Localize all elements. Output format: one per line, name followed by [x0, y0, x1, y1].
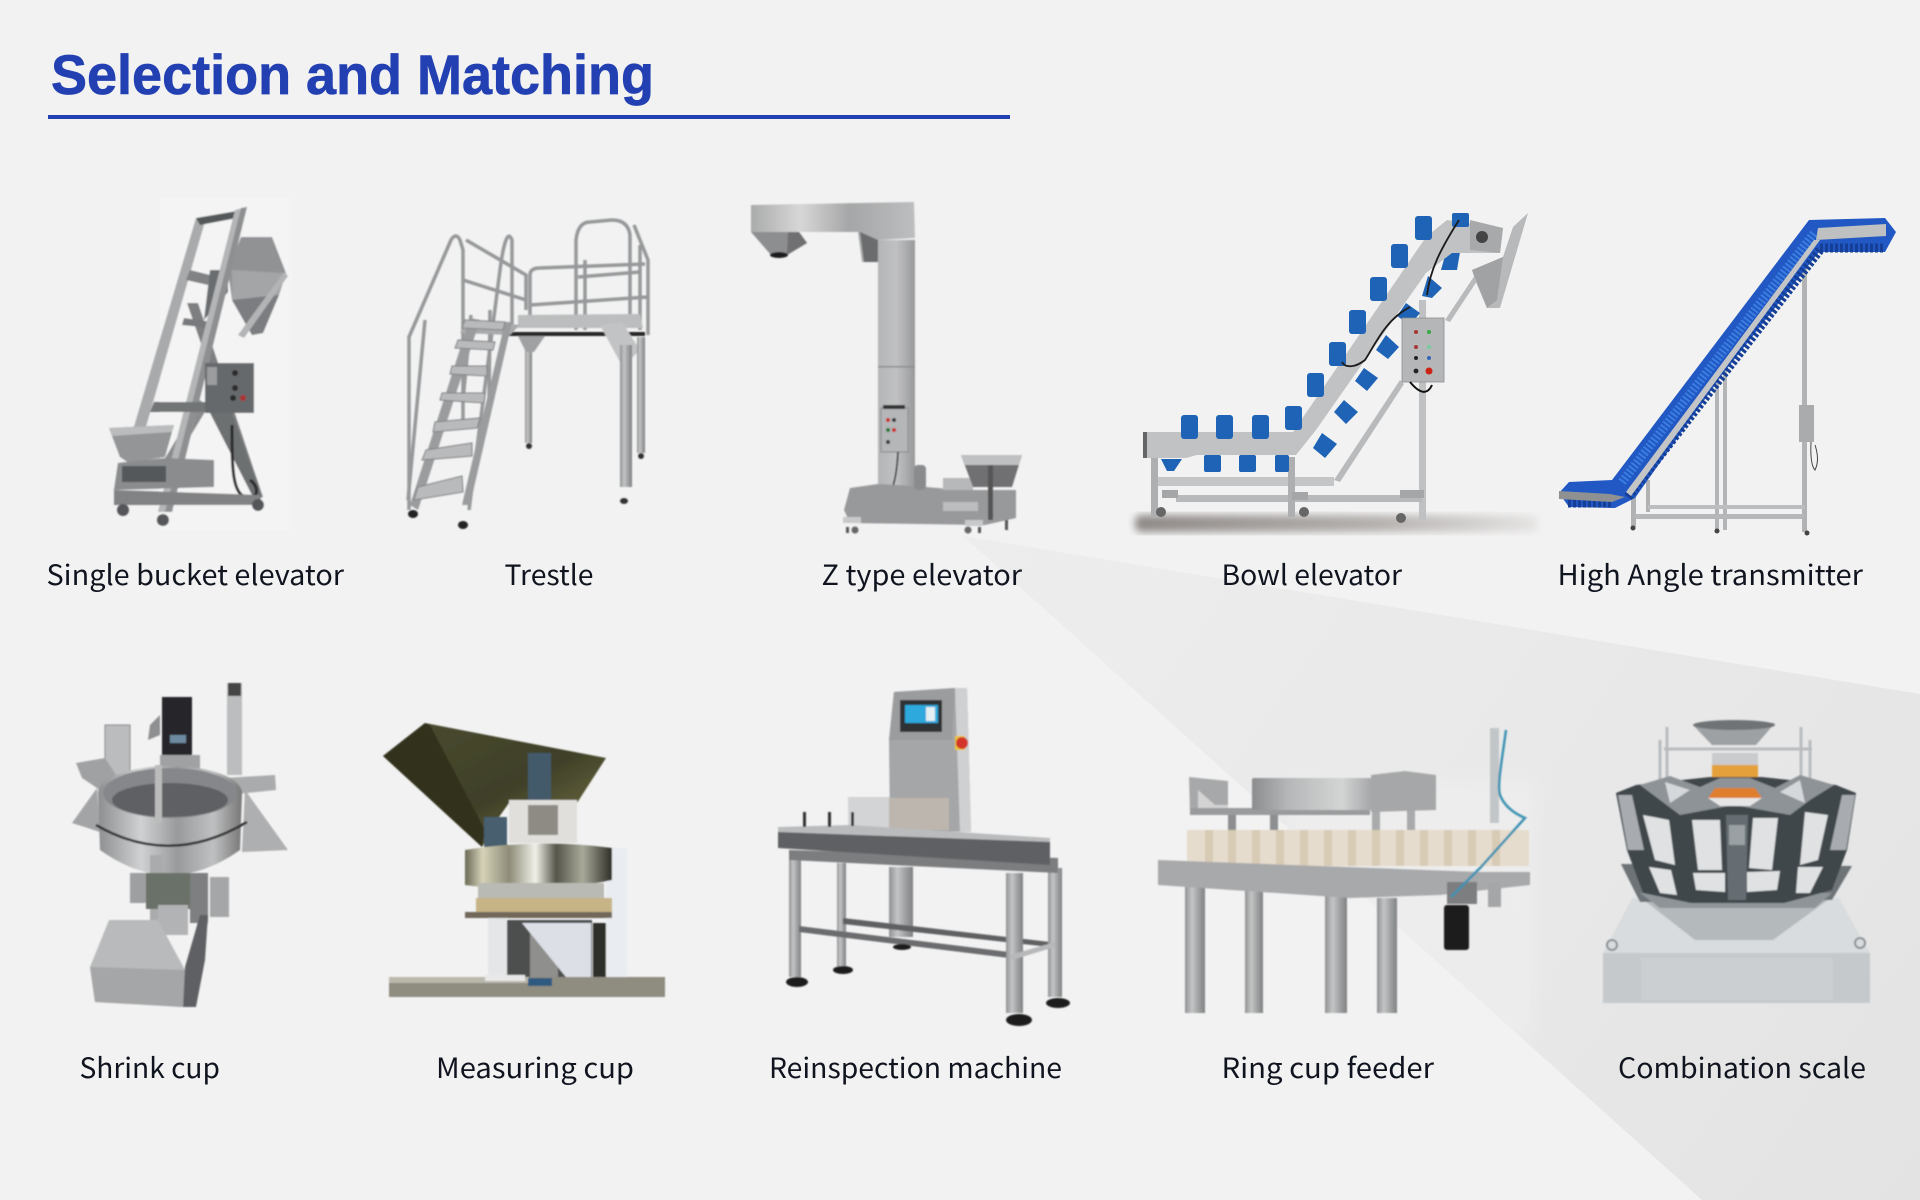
floor shadow: [1135, 515, 1538, 532]
label: Ring cup feeder: Ring cup feeder: [1222, 1047, 1434, 1087]
label: Z type elevator: Z type elevator: [822, 554, 1022, 594]
icon: Z type elevator: [751, 202, 1022, 534]
icon: combination scale: [1603, 720, 1870, 1003]
label: Bowl elevator: Bowl elevator: [1222, 554, 1402, 594]
light beam from Z type elevator to combination scale: [963, 536, 1920, 1200]
label: Combination scale: Combination scale: [1618, 1047, 1866, 1087]
label: Reinspection machine: Reinspection machine: [769, 1047, 1062, 1087]
title underline: [48, 115, 1010, 119]
label: Shrink cup: Shrink cup: [80, 1047, 220, 1087]
icon: single bucket elevator: [109, 198, 292, 530]
icon: reinspection machine: [778, 688, 1070, 1026]
upper blue buckets: [1181, 213, 1469, 439]
label: Trestle: Trestle: [504, 554, 594, 594]
icon: ring cup feeder: [1158, 728, 1535, 1040]
label: Measuring cup: Measuring cup: [436, 1047, 634, 1087]
icon: bowl elevator: [1135, 213, 1538, 532]
label: Single bucket elevator: Single bucket elevator: [46, 554, 344, 594]
icon: high angle transmitter: [1559, 218, 1896, 536]
main conveyor body: [1143, 220, 1503, 458]
icon: shrink cup: [72, 683, 288, 1007]
icon: measuring cup: [383, 723, 665, 997]
lower blue buckets: [1161, 252, 1460, 472]
label: High Angle transmitter: High Angle transmitter: [1558, 554, 1863, 594]
icon: trestle: [408, 220, 648, 529]
title: Selection and Matching: [51, 43, 654, 106]
